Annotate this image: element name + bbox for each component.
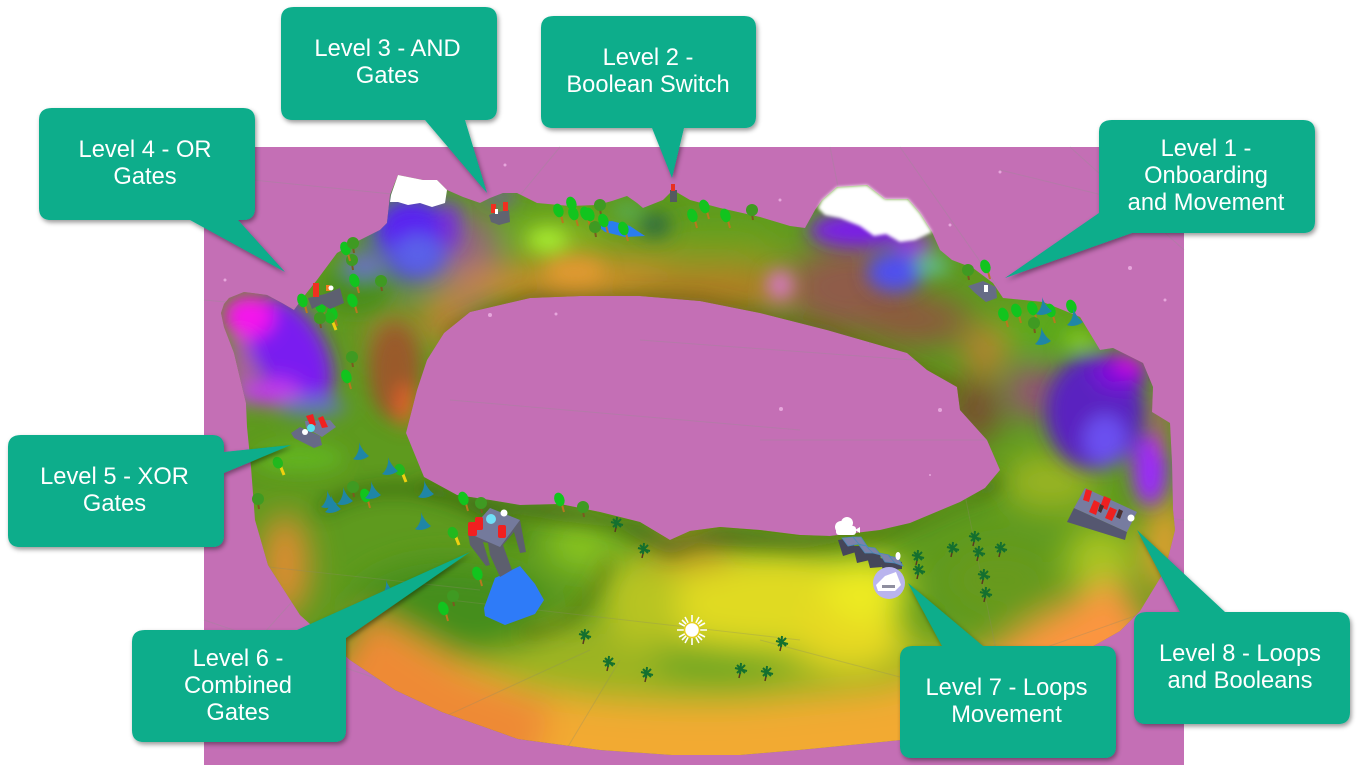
callout: Level 4: Level 4 - OR <box>79 137 211 163</box>
icon: sun <box>677 615 707 645</box>
level 6 tower platform <box>468 508 526 577</box>
level 5 platform <box>291 414 336 448</box>
level 4 platform <box>308 283 344 309</box>
level 1 platform <box>968 281 997 302</box>
icon: crafting badge <box>873 567 905 599</box>
right mountain <box>1045 354 1145 470</box>
blue cone plants <box>321 297 1083 598</box>
callout: Level 7: Movement <box>951 702 1062 728</box>
callout: Level 2: Level 2 - <box>603 45 693 71</box>
lake: front blue water <box>484 566 544 625</box>
callout: Level 7: Level 7 - Loops <box>926 675 1087 701</box>
lake: upper blue water <box>594 221 645 237</box>
callout: Level 1: Onboarding <box>1144 163 1268 189</box>
icon: camera <box>835 517 860 535</box>
callout: Level 6: Level 6 - <box>193 646 283 672</box>
left mountain <box>229 323 257 407</box>
callout: Level 7 <box>900 583 1116 758</box>
background: purple ground plane <box>204 147 1184 765</box>
back section <box>370 198 450 282</box>
snow caps <box>390 175 932 242</box>
outer rim orange <box>350 636 1120 760</box>
terrain grid overlay <box>270 498 1135 746</box>
callout: Level 8: Level 8 - Loops <box>1159 641 1321 667</box>
level 7 staircase platform <box>838 537 903 571</box>
callout: Level 8 <box>1134 530 1350 724</box>
callout: Level 4: Gates <box>113 164 177 190</box>
callout: Level 8: and Booleans <box>1168 668 1312 694</box>
palm trees <box>579 517 1007 682</box>
terrain ring with coloured elevation bands <box>200 170 1190 770</box>
level 2 switch <box>670 184 677 202</box>
callout: Level 2: Boolean Switch <box>566 72 730 98</box>
callout: Level 6: Gates <box>206 700 270 726</box>
trees <box>252 195 1078 621</box>
callout: Level 5 <box>8 435 291 547</box>
callout: Level 3: Level 3 - AND <box>314 36 461 62</box>
callout: Level 6 <box>132 552 470 742</box>
upper right mountain <box>788 243 912 333</box>
callout: Level 1: and Movement <box>1128 190 1285 216</box>
callout: Level 1: Level 1 - <box>1161 136 1251 162</box>
callout: Level 1 <box>1005 120 1315 278</box>
shading <box>420 470 1000 556</box>
front band colours <box>410 620 990 710</box>
callout: Level 6: Combined <box>184 673 292 699</box>
upper right details <box>808 212 908 248</box>
callout: Level 2 <box>541 16 756 178</box>
callout: Level 5: Gates <box>83 491 146 517</box>
callout: Level 4 <box>39 108 285 272</box>
level 3 platform <box>489 202 510 225</box>
top details <box>380 202 444 254</box>
callout: Level 3 <box>281 7 497 193</box>
level 8 platform <box>1067 488 1137 540</box>
callout: Level 5: Level 5 - XOR <box>40 464 189 490</box>
callout: Level 3: Gates <box>356 63 419 89</box>
